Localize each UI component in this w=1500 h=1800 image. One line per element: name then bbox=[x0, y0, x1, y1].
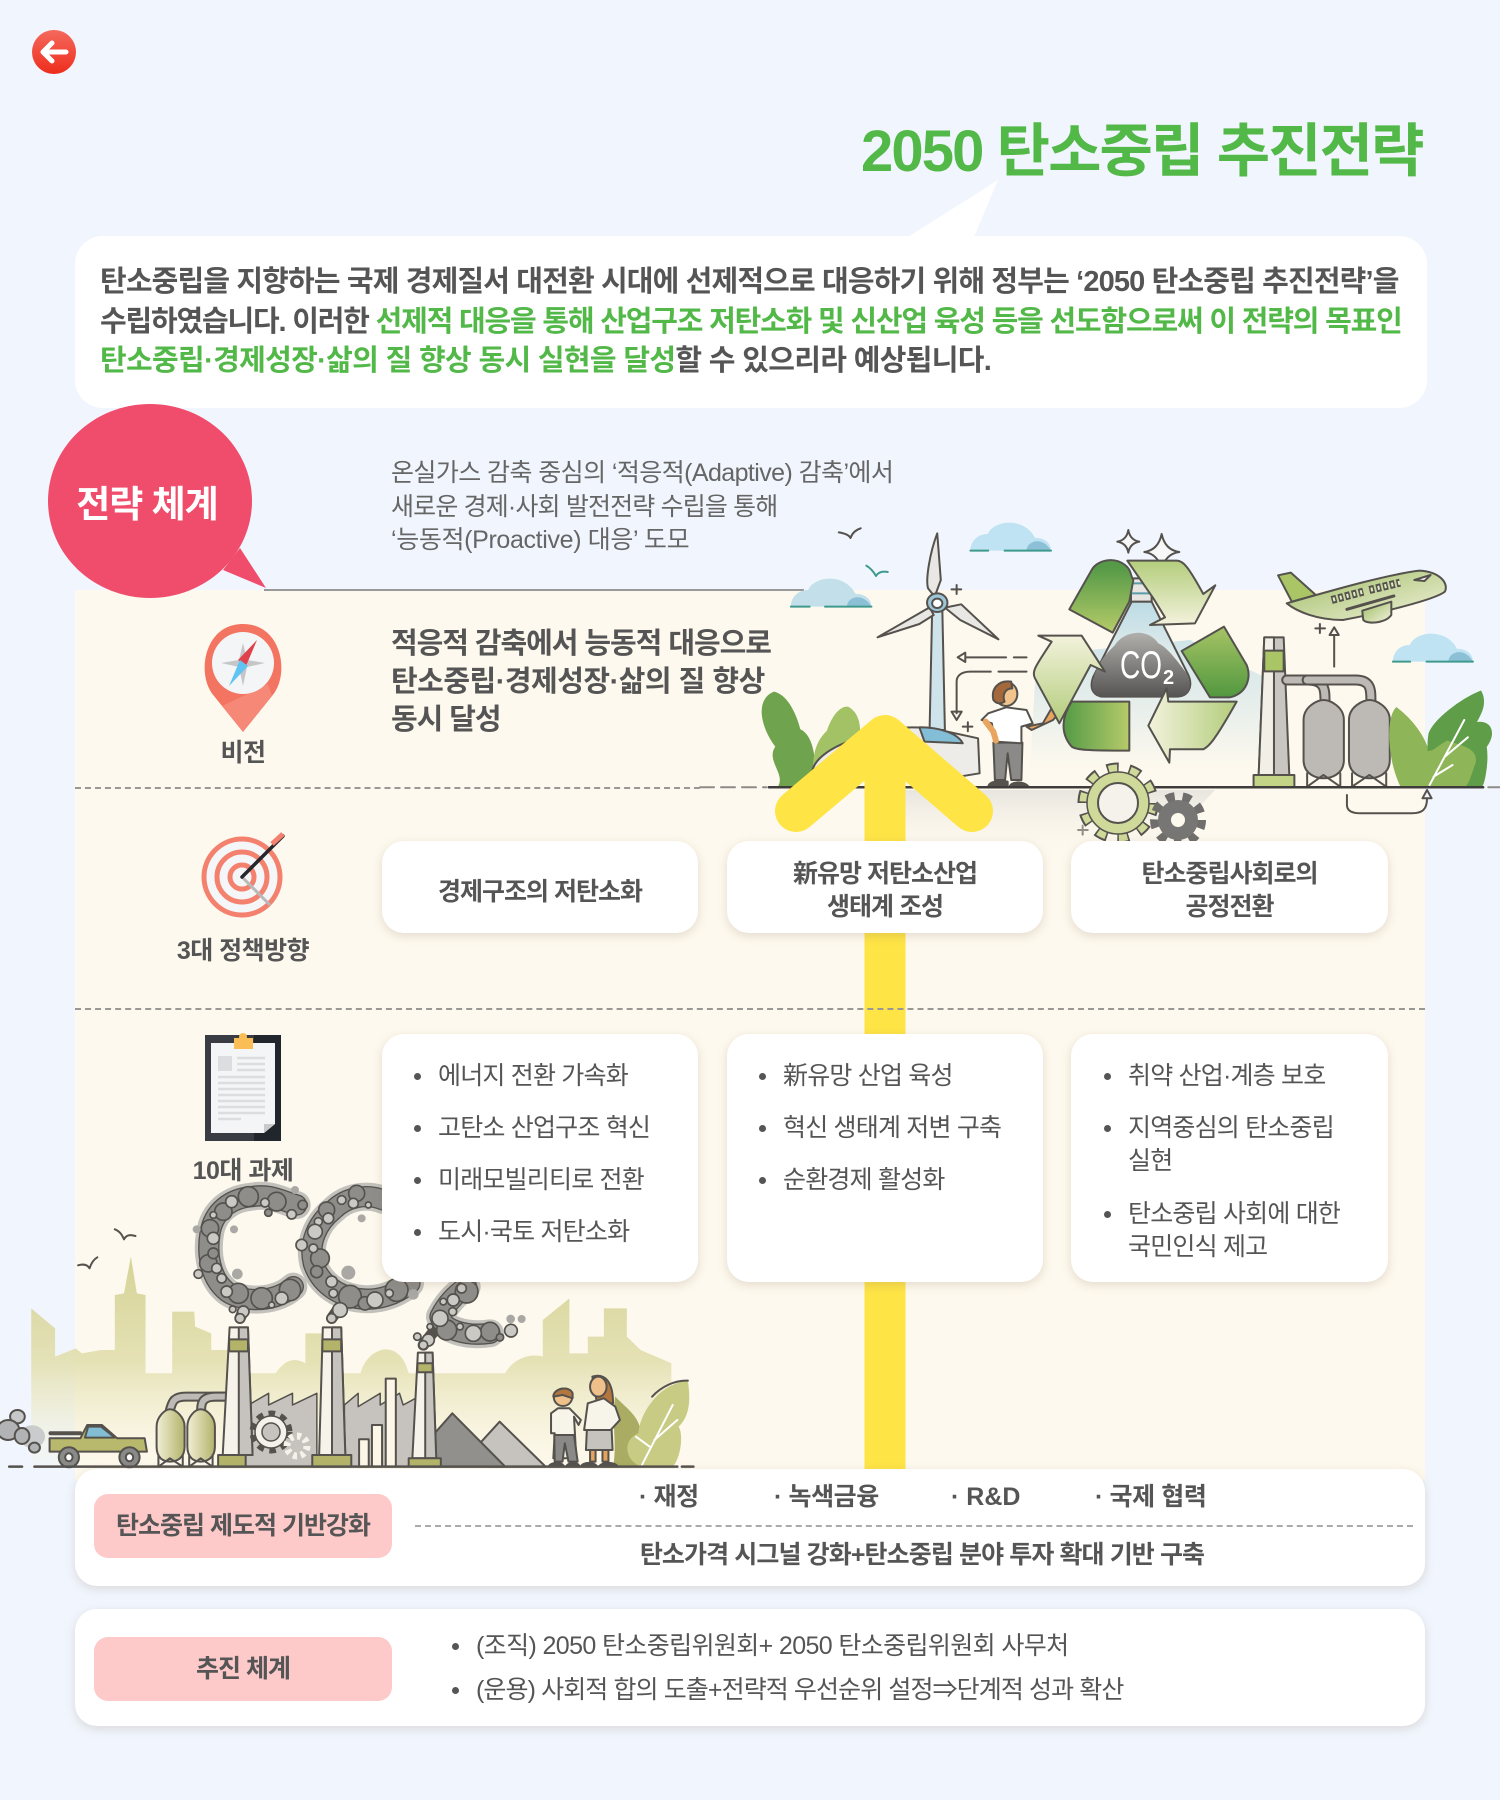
smoke outline bbox=[209, 1196, 490, 1334]
divider rule under strategy heading bbox=[264, 589, 804, 591]
gears bbox=[1085, 770, 1200, 842]
pickup truck bbox=[50, 1425, 147, 1467]
car bbox=[812, 727, 980, 777]
task list 1 bbox=[414, 1062, 650, 1246]
task list 1: 도시·국토 저탄소화 bbox=[438, 1218, 629, 1246]
label pill bbox=[94, 1637, 392, 1701]
ground shade bbox=[880, 790, 1215, 860]
label pill bbox=[94, 1494, 392, 1558]
card: direction 3: 공정전환 bbox=[1185, 893, 1274, 921]
recycle right bbox=[1182, 627, 1248, 697]
factory gears bbox=[254, 1415, 307, 1456]
card: tasks 1 bbox=[382, 1034, 698, 1282]
ground line bbox=[700, 786, 1500, 788]
task list 2: 순환경제 활성화 bbox=[783, 1166, 945, 1194]
label pill: 추진 체계 bbox=[196, 1655, 290, 1683]
dashed line bbox=[415, 1525, 1413, 1527]
card: direction 2 bbox=[727, 841, 1043, 933]
bracket arrow bbox=[1347, 790, 1432, 813]
smoke specks bbox=[193, 1186, 526, 1323]
pipes bbox=[1287, 680, 1371, 700]
smoke stems bbox=[240, 1302, 440, 1345]
dashed row divider 1 bbox=[75, 787, 700, 789]
CO2 label: 2 bbox=[1163, 667, 1174, 689]
flask body bbox=[1092, 578, 1190, 697]
left bushes bbox=[763, 693, 859, 787]
task list 2 bbox=[759, 1062, 1001, 1194]
panel: governance bbox=[75, 1609, 1425, 1726]
recycle top-right bbox=[1127, 561, 1215, 625]
olive leaf bbox=[627, 1381, 689, 1467]
task list 3: 실현 bbox=[1128, 1147, 1172, 1175]
dashed row divider 2 bbox=[75, 1008, 1425, 1010]
vision statement bbox=[391, 628, 771, 736]
task list 1: 미래모빌리티로 전환 bbox=[438, 1166, 644, 1194]
task list 3: 취약 산업·계층 보호 bbox=[1128, 1062, 1325, 1090]
pipes bbox=[170, 1397, 225, 1410]
storage tanks bbox=[1304, 700, 1390, 787]
callout tail bbox=[910, 180, 998, 236]
card: direction 3: 탄소중립사회로의 bbox=[1141, 860, 1318, 888]
task list 3: 국민인식 제고 bbox=[1128, 1233, 1267, 1261]
panel: intro text bbox=[75, 236, 1427, 408]
back button icon bbox=[32, 30, 76, 74]
smoke halo bbox=[209, 1196, 490, 1334]
airplane bbox=[1278, 571, 1446, 623]
label: ten tasks: 10대 과제 bbox=[193, 1157, 293, 1185]
task list 3: 탄소중립 사회에 대한 bbox=[1128, 1200, 1340, 1228]
card: direction 2: 생태계 조성 bbox=[827, 893, 943, 921]
CO2 label: CO bbox=[1120, 644, 1162, 687]
birds bbox=[839, 528, 888, 576]
recycle bottom-right bbox=[1148, 688, 1237, 763]
recycle top-left bbox=[1069, 560, 1133, 633]
vision statement: 탄소중립·경제성장·삶의 질 향상 bbox=[391, 666, 765, 698]
card: direction 1 bbox=[382, 841, 698, 933]
task list 1: 고탄소 산업구조 혁신 bbox=[438, 1114, 650, 1142]
label pill: 탄소중립 제도적 기반강화 bbox=[116, 1512, 370, 1540]
woman bbox=[581, 1376, 620, 1467]
sparkles bbox=[1117, 530, 1179, 570]
card: direction 2: 新유망 저탄소산업 bbox=[793, 860, 977, 888]
city skyline bbox=[31, 1257, 671, 1467]
cloud left bbox=[791, 579, 871, 607]
chimney 2 bbox=[312, 1327, 351, 1467]
vision statement: 적응적 감축에서 능동적 대응으로 bbox=[391, 628, 771, 660]
smoke puffs dark bbox=[200, 1185, 504, 1341]
right bushes bbox=[1390, 692, 1491, 787]
subtext: adaptive to proactive: 새로운 경제·사회 발전전략 수립을 통해 bbox=[391, 492, 777, 520]
olive bush back bbox=[613, 1397, 641, 1467]
governance list bbox=[452, 1632, 1124, 1704]
panel: institutional foundation bbox=[75, 1469, 1425, 1586]
card: tasks 3 bbox=[1071, 1034, 1388, 1282]
smoke core bbox=[209, 1196, 490, 1334]
item: international cooperation: · 국제 협력 bbox=[1095, 1483, 1206, 1511]
task list 2: 新유망 산업 육성 bbox=[783, 1062, 953, 1090]
task list 3: 지역중심의 탄소중립 bbox=[1128, 1114, 1334, 1142]
city glow behind flask bbox=[1030, 640, 1270, 770]
label: vision: 비전 bbox=[220, 739, 266, 767]
recycle bottom-left bbox=[1064, 702, 1129, 751]
mountains bbox=[432, 1413, 546, 1467]
recycle left bbox=[1034, 636, 1105, 723]
intro line 3: 탄소중립·경제성장·삶의 질 향상 동시 실현을 달성할 수 있으리라 예상됩니다. bbox=[100, 345, 991, 377]
icon: clipboard bbox=[205, 1033, 281, 1141]
up arrow to plane bbox=[1330, 627, 1339, 667]
smoke puffs light bbox=[194, 1196, 517, 1349]
person bbox=[982, 681, 1059, 787]
icon: target bbox=[202, 832, 285, 918]
factory bbox=[246, 1393, 416, 1467]
strategy bubble heading bbox=[48, 404, 266, 598]
flask and recycling symbol bbox=[1034, 530, 1248, 763]
panel: cream strategy background bbox=[75, 590, 1425, 1480]
vision statement: 동시 달성 bbox=[391, 704, 501, 736]
illustration: low-carbon future scene bbox=[699, 522, 1500, 841]
label: three policy directions: 3대 정책방향 bbox=[177, 937, 309, 965]
subtext: adaptive to proactive: 온실가스 감축 중심의 ‘적응적(Adaptive) 감축’에서 bbox=[391, 459, 893, 487]
ground line bbox=[9, 1465, 693, 1468]
intro line 1: 탄소중립을 지향하는 국제 경제질서 대전환 시대에 선제적으로 대응하기 위해 정부는 ‘2050 탄소중립 추진전략’을 bbox=[100, 266, 1399, 298]
exhaust bbox=[0, 1410, 45, 1453]
strategy bubble heading: 전략 체계 bbox=[76, 484, 218, 525]
task list 1: 에너지 전환 가속화 bbox=[438, 1062, 628, 1090]
item: finance: · 재정 bbox=[639, 1483, 699, 1511]
bars bbox=[359, 1379, 396, 1467]
title: 2050 탄소중립 추진전략 bbox=[861, 119, 1423, 184]
card: direction 3 bbox=[1071, 841, 1388, 933]
card: tasks 2 bbox=[727, 1034, 1043, 1282]
tanks bbox=[157, 1409, 215, 1467]
birds bbox=[78, 1229, 135, 1268]
icon: vision compass pin bbox=[204, 624, 282, 732]
chimney 3 bbox=[409, 1353, 441, 1467]
governance list: (운용) 사회적 합의 도출+전략적 우선순위 설정⇒단계적 성과 확산 bbox=[476, 1676, 1123, 1704]
plus marks bbox=[952, 585, 1325, 835]
dashed arrows to turbine bbox=[952, 653, 1027, 720]
task list 2: 혁신 생태계 저변 구축 bbox=[783, 1114, 1001, 1142]
subtext: adaptive to proactive: ‘능동적(Proactive) 대응’ 도모 bbox=[391, 526, 689, 554]
card: direction 1: 경제구조의 저탄소화 bbox=[438, 878, 642, 906]
subtext: adaptive to proactive bbox=[391, 459, 893, 554]
wind turbine bbox=[878, 533, 998, 730]
cloud right bbox=[1393, 634, 1473, 662]
item: green finance: · 녹색금융 bbox=[774, 1483, 879, 1511]
governance list: (조직) 2050 탄소중립위원회+ 2050 탄소중립위원회 사무처 bbox=[476, 1632, 1069, 1660]
item: R&D: · R&D bbox=[951, 1483, 1020, 1511]
task list 3 bbox=[1104, 1062, 1340, 1261]
kid bbox=[549, 1388, 581, 1467]
stack bbox=[1254, 637, 1294, 787]
carbon price statement: 탄소가격 시그널 강화+탄소중립 분야 투자 확대 기반 구축 bbox=[640, 1541, 1204, 1569]
intro line 2: 수립하였습니다. 이러한 선제적 대응을 통해 산업구조 저탄소화 및 신산업 육성 등을 선도함으로써 이 전략의 목표인 bbox=[100, 306, 1402, 338]
chimney 1 bbox=[218, 1327, 253, 1467]
cloud middle bbox=[970, 523, 1051, 551]
